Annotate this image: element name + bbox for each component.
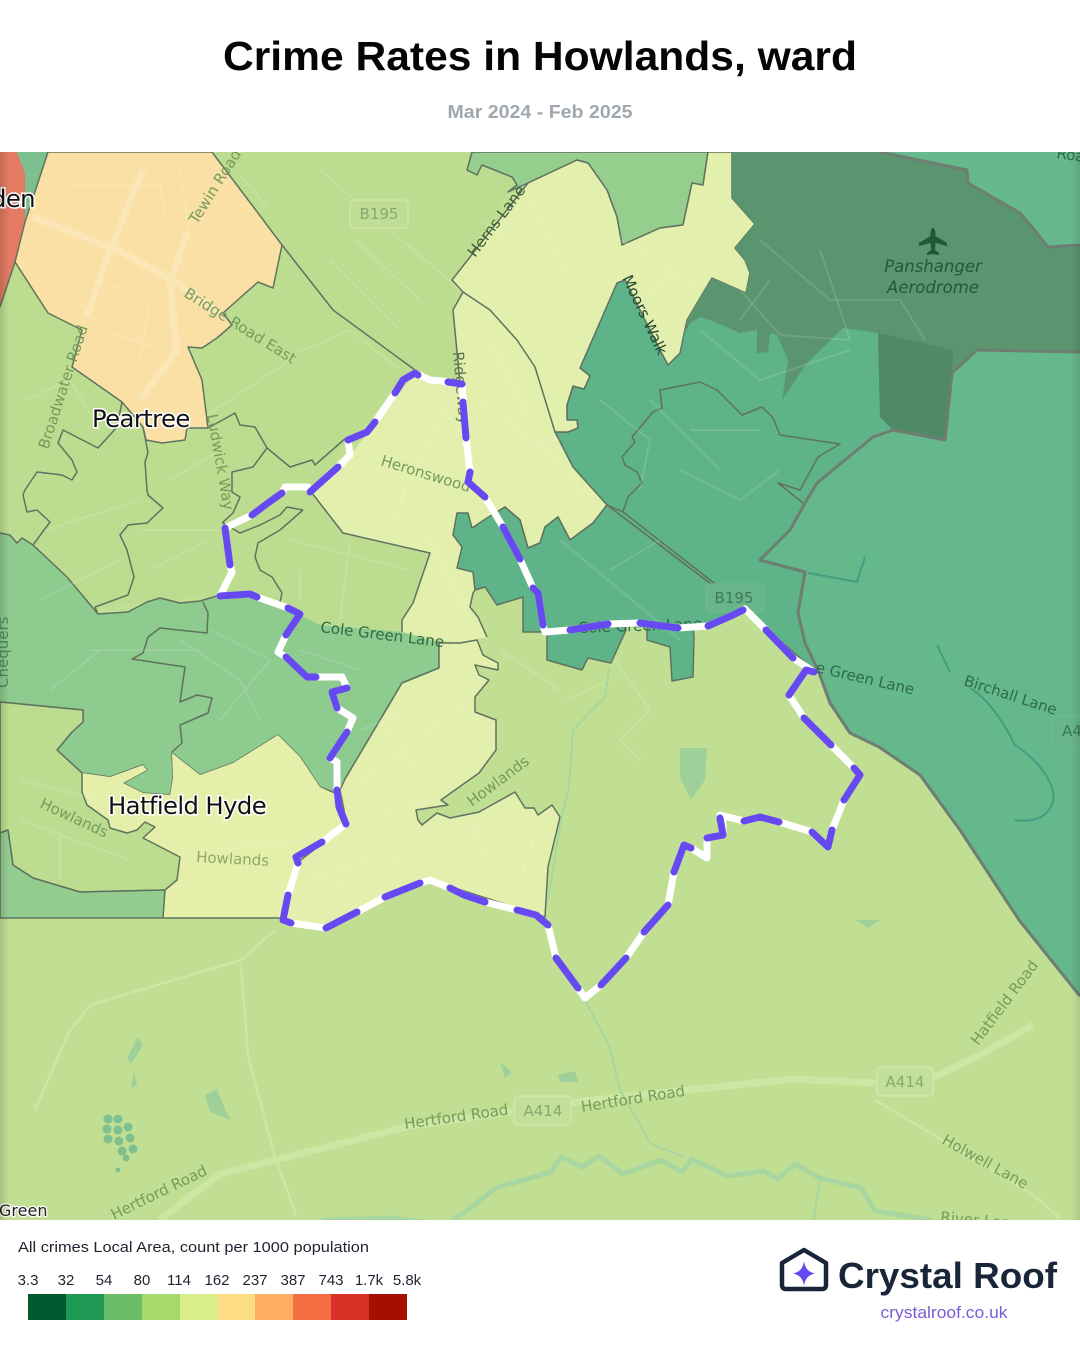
road shield: B195 north [350,200,408,228]
logo wordmark: Crystal Roof [838,1255,1058,1296]
road shield: A4 [1052,716,1080,744]
panel: Hatfield Hyde yellow ward [82,735,347,918]
icon: Panshanger airfield plane [919,228,947,255]
legend colour bar [28,1294,407,1320]
road labels: Cole Green Lane [578,615,702,637]
road labels: Broadwater Road [35,323,92,451]
label: Peartree: Peartree [92,404,190,433]
panel: south-central teal ward [453,505,745,632]
road labels: Howlands [196,848,270,870]
road labels: Howlands [464,752,533,810]
panel: east-central teal ward [555,280,900,670]
road labels: Hertford Road [108,1161,210,1224]
ward boundary: Howlands dashed outline [220,373,860,998]
road labels: Howlands [37,794,111,842]
panel: western and northern mid-green wards [0,152,517,632]
label: partial place name bottom-left: Green [0,1201,47,1220]
east ward inner lines [608,381,841,584]
legend tick labels: 54 [96,1272,112,1289]
panel: north-east teal ward [880,152,1080,247]
subtitle: date range: Mar 2024 - Feb 2025 [448,102,632,122]
road labels: Hertford Road [403,1101,509,1133]
road shield: B195 north: B195 [360,205,398,223]
label: Panshanger Aerodrome: Aerodrome [886,278,979,297]
road shield: A414 east: A414 [886,1073,924,1091]
legend [18,1239,422,1320]
road labels: Moors Walk [618,272,671,358]
panel: north-east yellow ward [452,152,755,548]
panel: teal blob east under Cole Green Lane [647,625,694,681]
solar panels [102,1114,138,1172]
legend tick labels: 32 [58,1272,74,1289]
river and stream channels [324,670,930,1225]
icon: house outline with star [782,1250,826,1289]
legend tick labels: 3.3 [18,1272,38,1289]
west green ward lines [0,533,439,795]
road labels: Holwell Lane [939,1131,1031,1193]
thick border of the far-east ward [760,152,1080,996]
legend tick labels: 114 [167,1272,191,1289]
road labels: Ridgeway [449,351,473,425]
panel: top-centre green ward [467,152,708,245]
legend tick labels: 387 [280,1272,306,1289]
road labels: Cole Green Lane [320,618,445,651]
legend tick labels: 1.7k [355,1272,384,1289]
road labels: e Green Lane [814,658,916,699]
road labels: Ludwick Way [203,413,238,512]
western ward lines [0,245,415,607]
legend tick labels: 743 [318,1272,344,1289]
road labels: Herns Lane [464,182,529,260]
road shield: A414 centre: A414 [524,1102,562,1120]
road labels: River Lea [940,1208,1011,1232]
road labels: Bridge Road East [181,284,299,368]
legend tick labels: 80 [134,1272,150,1289]
residential street texture [20,170,925,900]
panel: red ward [0,152,25,307]
panel: Heronswood yellow ward [312,373,505,643]
panel: Howlands south yellow ward [285,640,560,930]
panel: teal blob under Cole Green Lane [547,622,626,670]
logo: Crystal Roof [782,1250,1058,1322]
title: Crime Rates in Howlands, ward [223,33,857,79]
road shield: B195 east [706,584,764,612]
yellow ward internal line [463,292,555,432]
main roads [35,930,1060,1220]
road labels: Hertford Road [580,1082,686,1116]
panel: south-west strip [0,830,165,918]
legend tick labels [18,1272,422,1289]
legend title: All crimes Local Area, count per 1000 population [18,1239,369,1256]
legend tick labels: 5.8k [393,1272,422,1289]
road labels: Hatfield Road [967,957,1042,1048]
road shield: A414 centre [514,1096,571,1125]
panel: teal wedge [17,152,48,222]
panel: south-west mid green ward [0,702,180,892]
panel: far-east ward [760,350,1080,996]
panel: orange ward (peach) [15,152,282,443]
panel: west green ward [0,533,439,795]
legend tick labels: 237 [242,1272,268,1289]
legend tick labels: 162 [204,1272,230,1289]
road labels: Heronswood [379,452,473,496]
road shield: A414 east [877,1067,933,1096]
road labels: Tewin Road [185,146,245,228]
panel: darkest green ward, Panshanger [680,152,1080,400]
road labels: Birchall Lane [962,672,1059,719]
map edge shading [0,152,1080,1220]
ponds [127,748,880,1120]
east streams [808,557,1053,821]
label: Panshanger Aerodrome [884,259,983,293]
panel: darker aerodrome field [878,333,953,440]
label: Panshanger Aerodrome: Panshanger [884,257,983,276]
logo url: crystalroof.co.uk [880,1304,1008,1322]
road shield: B195 east: B195 [715,589,753,607]
label: Hatfield Hyde: Hatfield Hyde [108,791,266,820]
